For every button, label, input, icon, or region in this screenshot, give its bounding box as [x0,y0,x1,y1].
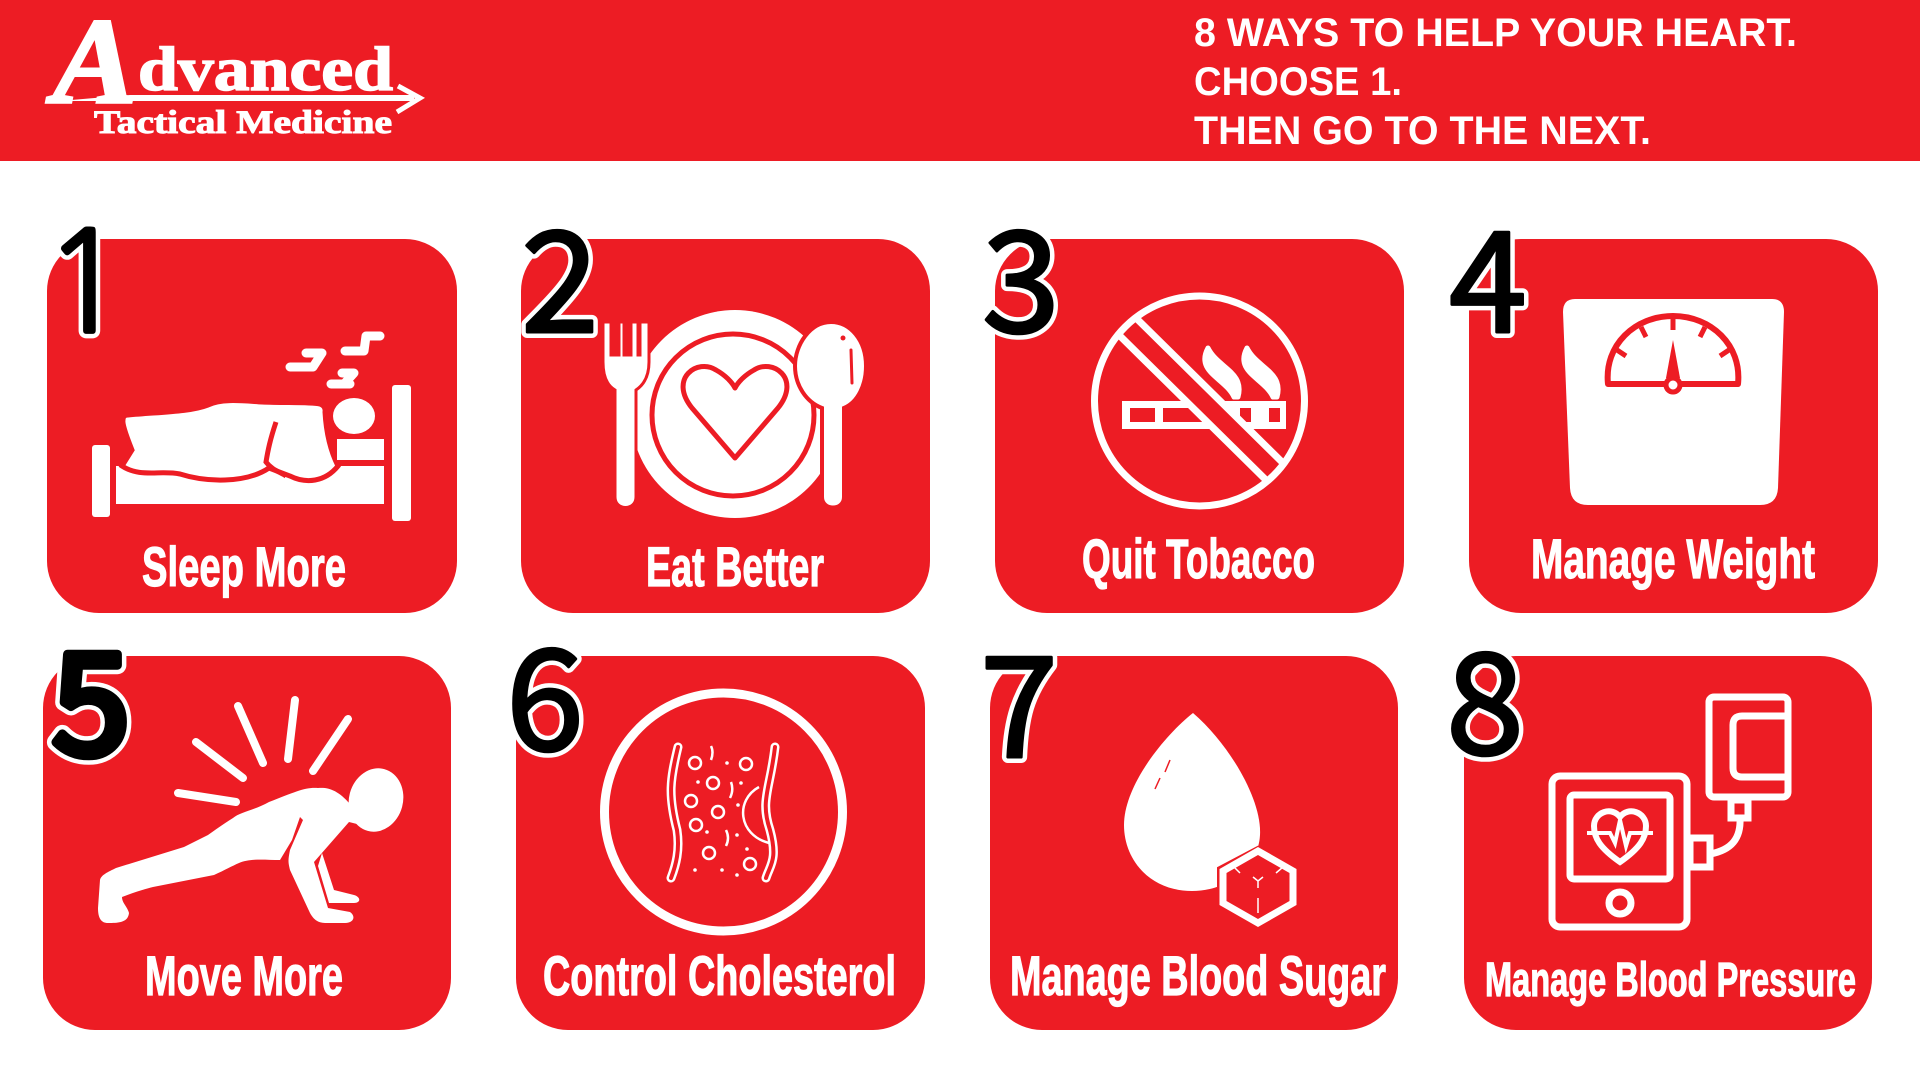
number 8: 8 [1446,593,1524,795]
icon: push-up figure [98,700,410,923]
number 5: 5 [52,593,130,795]
logo: Advanced Tactical Medicine: Tactical Medicine [94,105,392,141]
number 8: 8 [1446,593,1524,795]
panel: sleep more [43,213,457,613]
number 2: 2 [521,171,599,373]
label: Manage Blood Sugar [1010,944,1386,1007]
number 1: 1 [43,213,127,353]
label: Control Cholesterol [543,944,896,1007]
icon: no smoking [1094,296,1304,506]
panel: manage blood sugar [980,596,1398,1030]
number 6: 6 [506,589,584,791]
panel: control cholesterol [506,589,925,1030]
logo: Advanced Tactical Medicine [46,0,420,141]
label: Quit Tobacco [1082,527,1315,590]
panel: move more [43,593,451,1030]
icon: plate with heart, fork and spoon [603,310,866,518]
heading text [1194,11,1797,153]
number 4: 4 [1449,171,1527,373]
panel: manage weight [1449,171,1878,613]
icon: sleeping in bed [92,336,411,521]
label: Eat Better [646,535,824,598]
logo: Advanced Tactical Medicine: dvanced [138,36,393,104]
panel: eat better [521,171,930,613]
label: Move More [145,944,343,1007]
number 6: 6 [506,589,584,791]
icon: artery with cholesterol [604,693,842,931]
number 4: 4 [1449,171,1527,373]
number 7: 7 [980,596,1058,798]
heading text: THEN GO TO THE NEXT. [1194,109,1651,153]
number 1: 1 [43,213,127,353]
label: Sleep More [142,535,346,598]
heading text: 8 WAYS TO HELP YOUR HEART. [1194,11,1797,55]
panel: quit tobacco [982,171,1404,613]
icon: weighing scale [1563,299,1784,505]
number 3: 3 [982,171,1060,373]
panel: manage blood pressure [1446,593,1872,1030]
heading text: CHOOSE 1. [1194,60,1402,104]
number 2: 2 [521,171,599,373]
icon: blood drop with sugar cube [1124,713,1296,925]
number 3: 3 [982,171,1060,373]
icon: blood pressure monitor [1552,697,1788,927]
number 7: 7 [980,596,1058,798]
number 5: 5 [52,593,130,795]
header banner [0,0,1920,161]
